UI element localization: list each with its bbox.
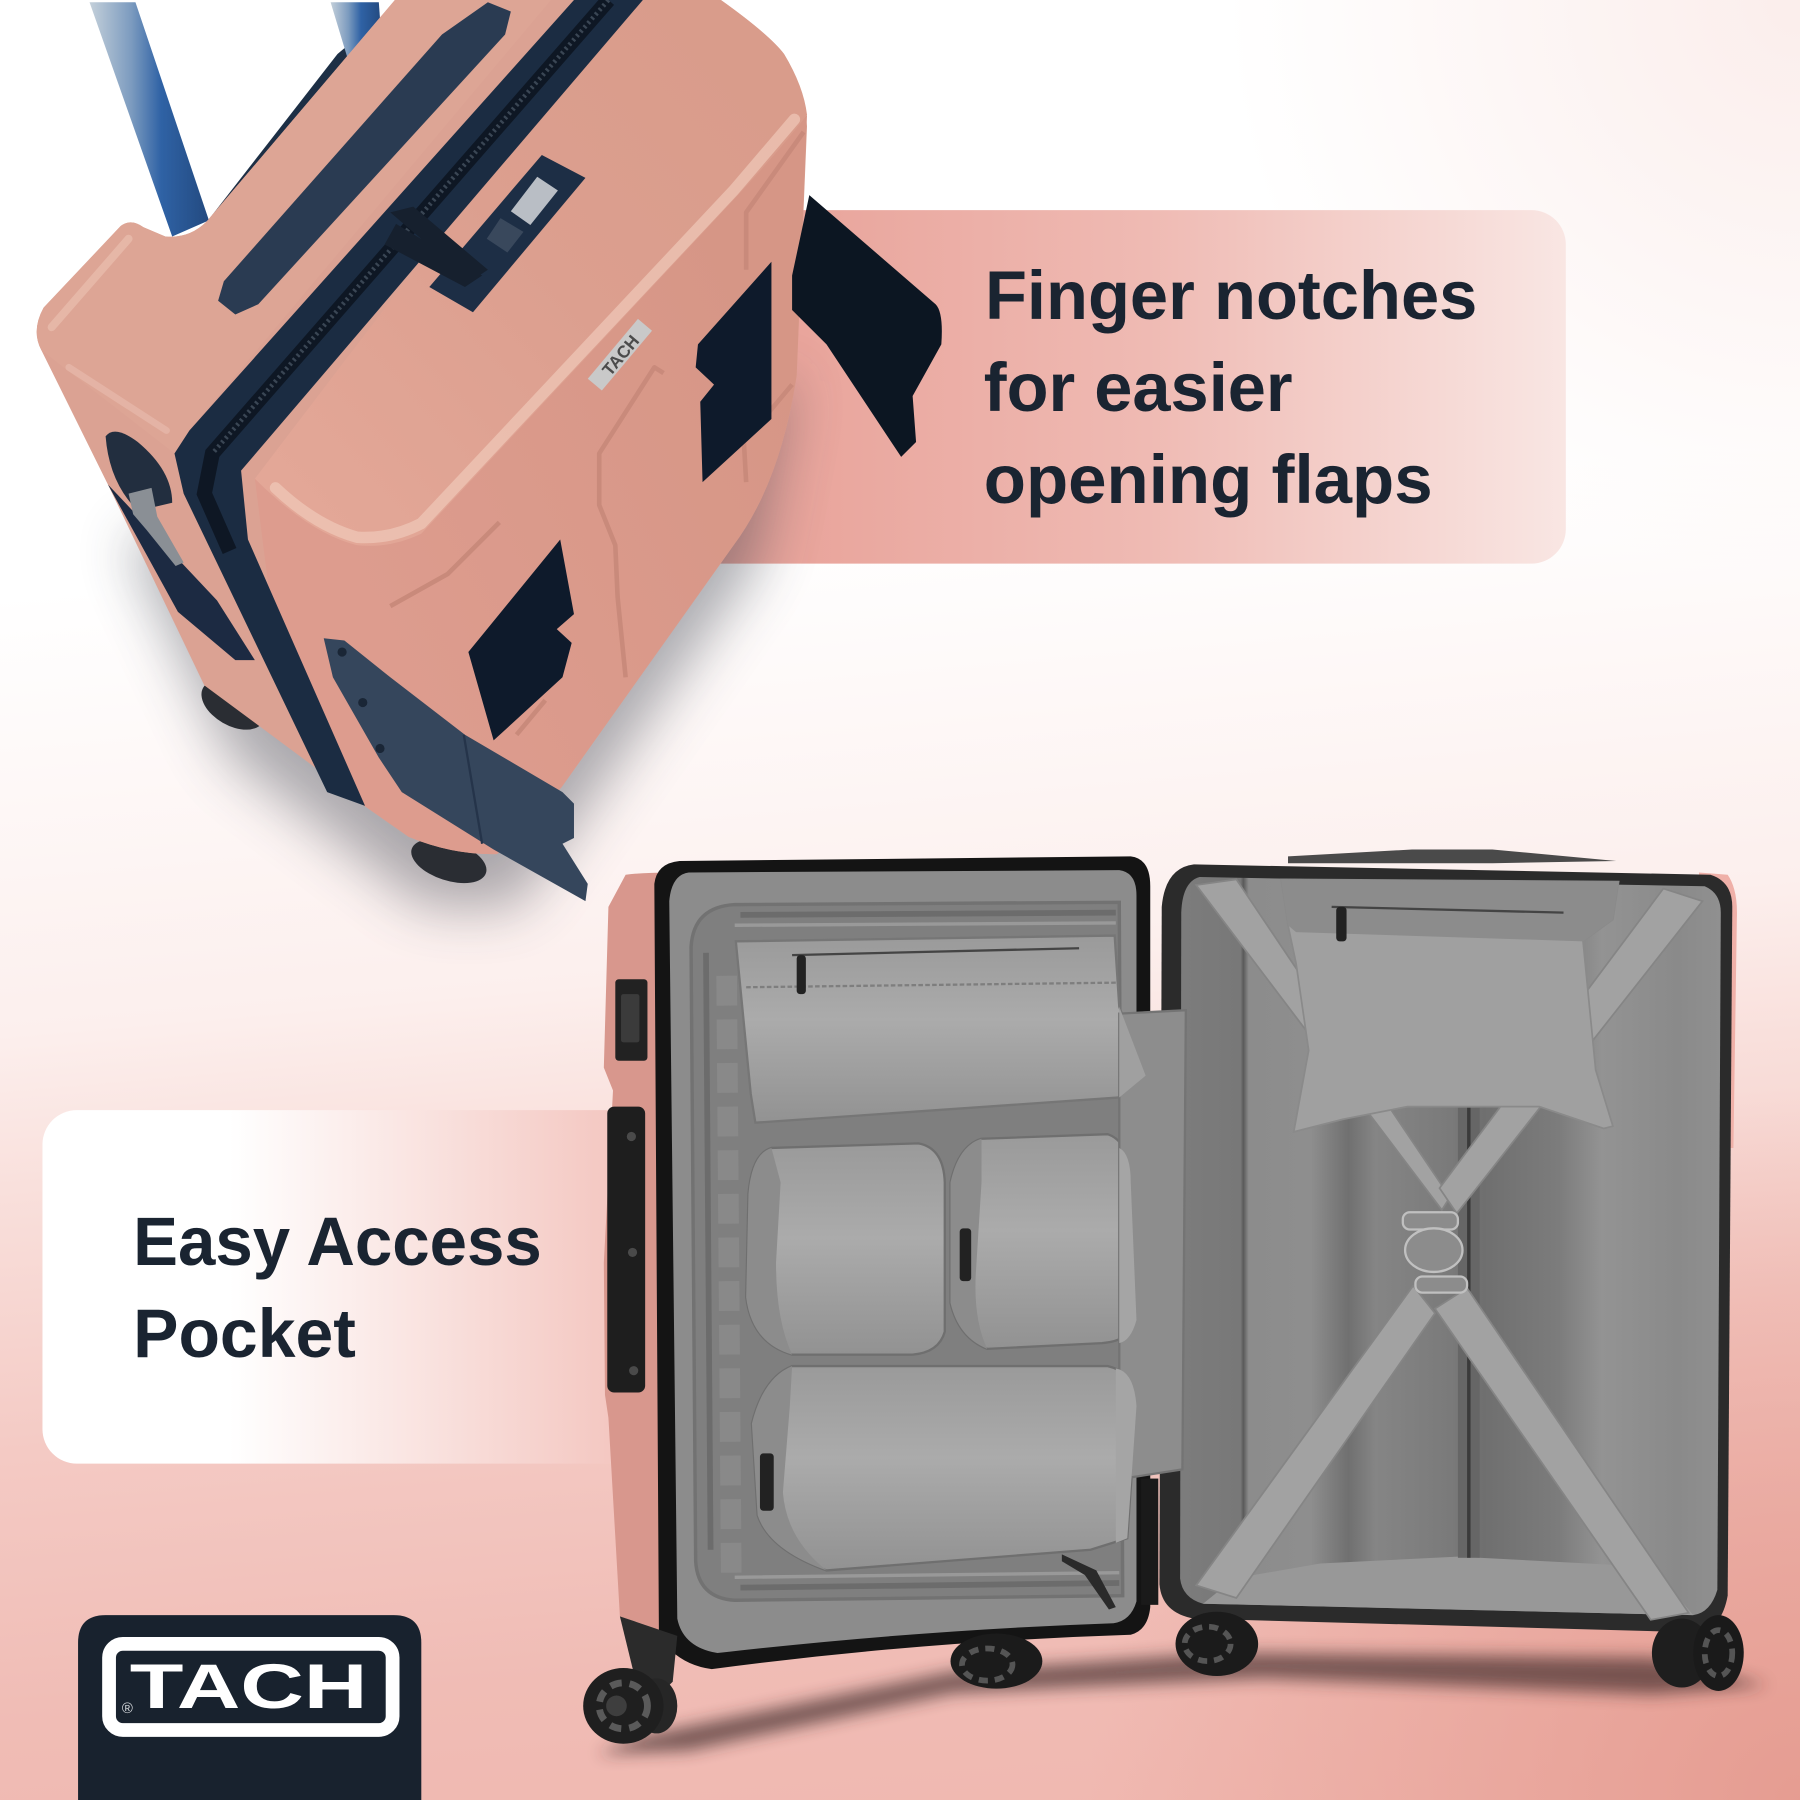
- heading: finger notches: for easier: [984, 349, 1293, 426]
- bottom pouch: [752, 1366, 1136, 1570]
- zipper pull: [797, 955, 806, 994]
- zipper pull: [960, 1228, 971, 1281]
- side lock: [615, 979, 647, 1061]
- suitcase shell: [37, 0, 807, 854]
- strap buckle: [1403, 1212, 1467, 1293]
- telescopic trolley handle: [90, 0, 643, 276]
- registered mark: ®: [122, 1700, 133, 1717]
- hinge fabric strip: [1119, 1010, 1186, 1477]
- zipper pulls: [385, 207, 488, 287]
- panel: easy access pocket callout: [42, 1110, 639, 1464]
- logo: TACH brand block: [78, 1615, 421, 1800]
- combination lock: [429, 155, 585, 312]
- top pouch: [736, 936, 1146, 1123]
- left lining: [669, 870, 1136, 1653]
- TACH badge on shell: [588, 319, 653, 392]
- left wheels: [583, 1616, 1042, 1744]
- bottom floor of lining: [1203, 1557, 1693, 1615]
- re-drawn pouch edges over hinge strip: [1116, 1007, 1146, 1543]
- velcro patches: [108, 262, 771, 740]
- mesh pocket with zip border: [691, 902, 1123, 1600]
- TACH badge on shell: TACH: [598, 331, 643, 380]
- logo wordmark: TACH: [130, 1652, 367, 1722]
- top carry handle: [218, 2, 511, 315]
- heading: finger notches: Finger notches: [985, 257, 1477, 334]
- heading: finger notches: opening flaps: [984, 441, 1433, 518]
- hanging pillow pouch: [1281, 879, 1619, 1132]
- right shell frame: [1159, 864, 1732, 1632]
- side carry handle: [106, 432, 184, 566]
- corner zipper pull: [1062, 1554, 1116, 1609]
- photo: closed suitcase with opening flaps: [37, 0, 942, 907]
- zipper pull: [1336, 907, 1347, 941]
- easy access pocket zip patch: [607, 1107, 645, 1392]
- shell side face: [255, 115, 807, 854]
- right lining: [1180, 877, 1721, 1615]
- left shell frame: [654, 856, 1150, 1669]
- shell edge highlights: [52, 119, 794, 538]
- shell top face: [255, 0, 807, 546]
- centre seam: [1458, 1108, 1480, 1558]
- embossed ridges: [390, 132, 804, 735]
- cross straps: [1196, 879, 1702, 1620]
- floor shadows: [597, 1653, 1768, 1754]
- wheels of closed suitcase: [193, 670, 492, 892]
- middle right pouch: [951, 1134, 1136, 1349]
- black hinge zipper: [1141, 1479, 1158, 1605]
- heading: easy access pocket: Pocket: [133, 1295, 356, 1372]
- middle left pouch: [746, 1143, 945, 1355]
- panel: finger notches callout: [643, 210, 1566, 564]
- zipper pull: [760, 1453, 774, 1511]
- bottom opening flap: [324, 638, 588, 901]
- suitcase drop shadow: [126, 379, 792, 907]
- right wheels: [1176, 1612, 1744, 1691]
- right opening flap: [792, 195, 942, 457]
- heading: easy access pocket: Easy Access: [133, 1203, 542, 1280]
- top handle of open suitcase: [1288, 849, 1616, 863]
- photo: open suitcase showing pockets: [583, 849, 1768, 1754]
- zipper band: [174, 0, 643, 806]
- rose outer shell: [604, 872, 1737, 1636]
